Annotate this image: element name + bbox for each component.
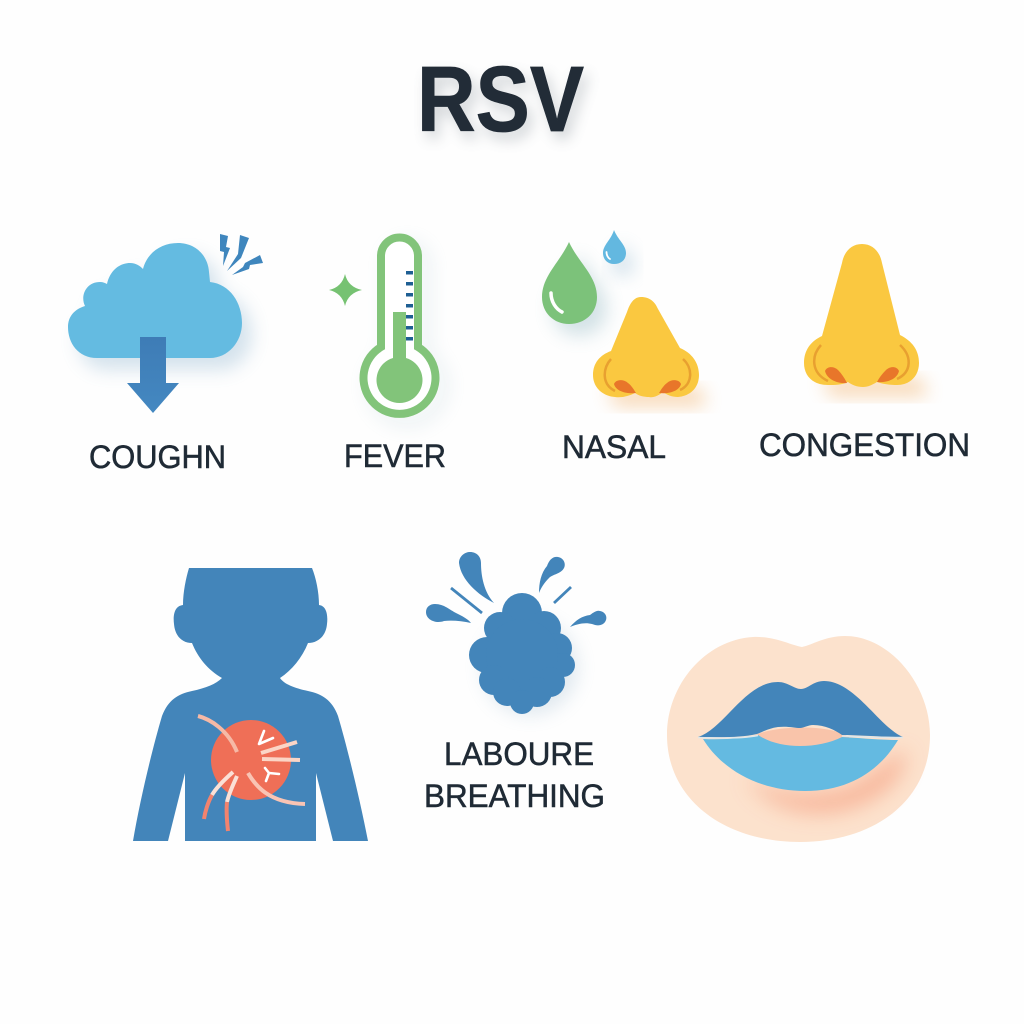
label: laboure breathing: LABOURE <box>444 736 594 772</box>
icon: blue lips <box>667 636 930 842</box>
icon: green sparkle <box>329 274 362 306</box>
icon: child with chest pain <box>133 568 368 841</box>
label: congestion: CONGESTION <box>759 427 970 463</box>
title: RSV <box>417 47 584 151</box>
label: fever: FEVER <box>344 438 446 474</box>
icon: blue drop <box>603 230 626 264</box>
icon: down arrow <box>127 337 179 413</box>
lower lip <box>703 735 898 791</box>
icon: cough sparks <box>220 234 263 275</box>
label: laboure breathing <box>424 736 605 814</box>
icon: nose <box>593 297 706 406</box>
label: laboure breathing: BREATHING <box>424 778 605 814</box>
icon: cough cloud <box>68 234 263 413</box>
icon: labored breathing burst <box>426 552 606 715</box>
icon: congestion nose <box>804 244 928 396</box>
icon: inflamed lungs <box>198 716 305 831</box>
mouth gap <box>750 728 850 747</box>
label: nasal: NASAL <box>562 429 666 465</box>
upper lip <box>698 681 903 737</box>
label: cough: COUGHN <box>89 439 226 475</box>
title: RSV <box>422 55 589 159</box>
icon: thermometer <box>329 238 444 422</box>
icon: green drop <box>542 242 597 324</box>
icon: breath droplets <box>426 552 606 627</box>
icon: nose with drops <box>542 230 706 406</box>
